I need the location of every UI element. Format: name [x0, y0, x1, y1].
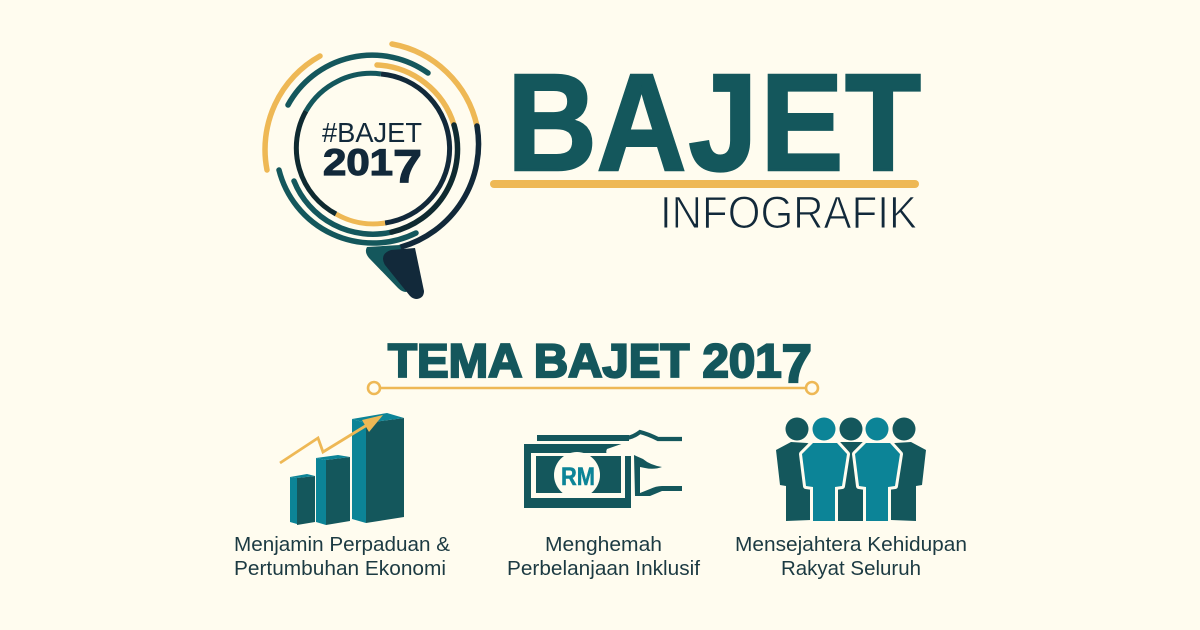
heading divider with end circles	[368, 382, 818, 394]
label: welfare: Mensejahtera Kehidupan	[735, 533, 967, 556]
label: economy: Menjamin Perpaduan &	[234, 533, 450, 556]
label: spending: Menghemah	[545, 533, 662, 556]
logo year text: 201	[323, 142, 385, 183]
inner ring arcs	[296, 73, 450, 224]
subtitle: INFOGRAFIK	[660, 187, 917, 238]
title underline	[490, 180, 919, 188]
icon: hand holding money: RM	[561, 463, 595, 491]
logo year text: 7	[393, 140, 422, 192]
icon: growth bar chart	[280, 413, 404, 525]
section heading: 7	[782, 334, 812, 394]
icon: hand holding money	[524, 432, 690, 508]
label: spending: Perbelanjaan Inklusif	[507, 557, 700, 580]
label: welfare: Rakyat Seluruh	[781, 557, 921, 580]
label: economy	[234, 533, 450, 580]
teal ring arcs	[279, 55, 428, 243]
speech bubble tail	[366, 245, 424, 299]
section heading: TEMA BAJET 201	[388, 334, 778, 387]
logo: speech bubble rings	[265, 44, 479, 299]
label: economy: Pertumbuhan Ekonomi	[234, 557, 446, 580]
logo hashtag text: #BAJET	[322, 117, 422, 148]
label: spending	[507, 533, 700, 580]
main title: BAJET	[507, 45, 921, 199]
second ring arcs	[294, 65, 458, 234]
icon: group of people	[776, 418, 926, 521]
outer ring arcs	[265, 44, 479, 247]
label: welfare	[735, 533, 967, 580]
